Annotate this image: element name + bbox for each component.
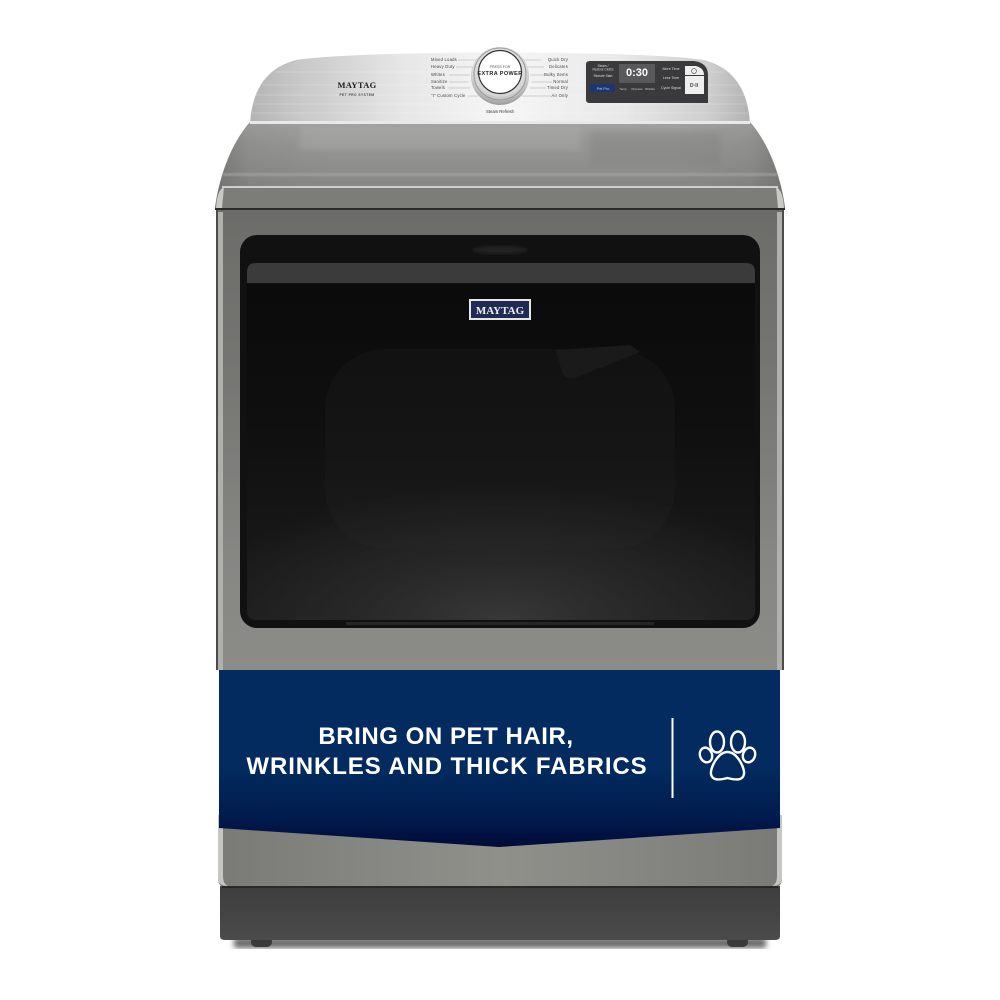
right cycle labels: Air Only <box>552 93 569 98</box>
banner <box>219 670 780 847</box>
banner divider <box>672 718 674 798</box>
door handle recess <box>472 246 528 254</box>
display panel <box>586 61 708 103</box>
banner text: BRING ON PET HAIR, <box>318 723 574 750</box>
display panel: Remote Start <box>594 74 613 78</box>
display panel: Dryness <box>631 87 643 91</box>
left cycle labels: "I" Custom Cycle <box>431 93 466 98</box>
right cycle labels: Normal <box>553 79 568 84</box>
right cycle labels: Quick Dry <box>548 57 569 62</box>
dryer cabinet body <box>216 210 784 670</box>
door maytag badge: MAYTAG <box>476 305 525 317</box>
door panel <box>247 263 755 620</box>
cycle leader lines <box>448 60 552 96</box>
right cycle labels: Delicates <box>549 64 568 69</box>
banner text: WRINKLES AND THICK FABRICS <box>246 753 648 780</box>
display panel: Temp <box>619 87 627 91</box>
cycle selector dial: EXTRA POWER <box>477 71 523 77</box>
lint screen vent <box>556 345 640 378</box>
display panel: Wrinkle <box>645 87 655 91</box>
right cycle labels: Timed Dry <box>547 85 569 90</box>
pet pro system label: PET PRO SYSTEM <box>340 93 374 97</box>
left cycle labels: Heavy Duty <box>431 64 455 69</box>
left cycle labels <box>431 57 466 98</box>
right cycle labels: Bulky Items <box>544 72 568 77</box>
right cycle labels <box>544 57 569 98</box>
door maytag badge <box>469 299 531 320</box>
left cycle labels: Towels <box>431 85 445 90</box>
display panel: 0:30 <box>626 67 648 79</box>
base plinth <box>220 886 780 940</box>
control console panel <box>250 47 750 124</box>
cycle selector dial <box>471 47 529 105</box>
display panel: Less Time <box>663 76 679 80</box>
left cycle labels: Whites <box>431 72 445 77</box>
display panel: More Time <box>663 67 679 71</box>
door bottom seam <box>346 622 654 625</box>
display panel: Steam / <box>598 64 609 68</box>
banner text <box>246 723 648 780</box>
display panel: Restore Cloths <box>592 68 614 72</box>
lower cabinet <box>218 815 782 888</box>
left cycle labels: Sanitize <box>431 79 448 84</box>
display panel: Cycle Signal <box>661 86 681 90</box>
icon: paw print <box>698 732 757 779</box>
display panel: Pet Pro <box>597 87 609 91</box>
left cycle labels: Mixed Loads <box>431 57 457 62</box>
display panel: D·II <box>690 83 699 89</box>
lid front lip <box>215 186 785 210</box>
icon: dryer feet <box>251 936 748 947</box>
steam refresh label: Steam Refresh <box>486 109 515 114</box>
dryer lid <box>215 122 785 208</box>
cycle selector dial: PRESS FOR <box>490 65 511 69</box>
floor shadow <box>234 938 766 948</box>
maytag console logo: MAYTAG <box>337 80 377 90</box>
door recess <box>240 235 760 628</box>
